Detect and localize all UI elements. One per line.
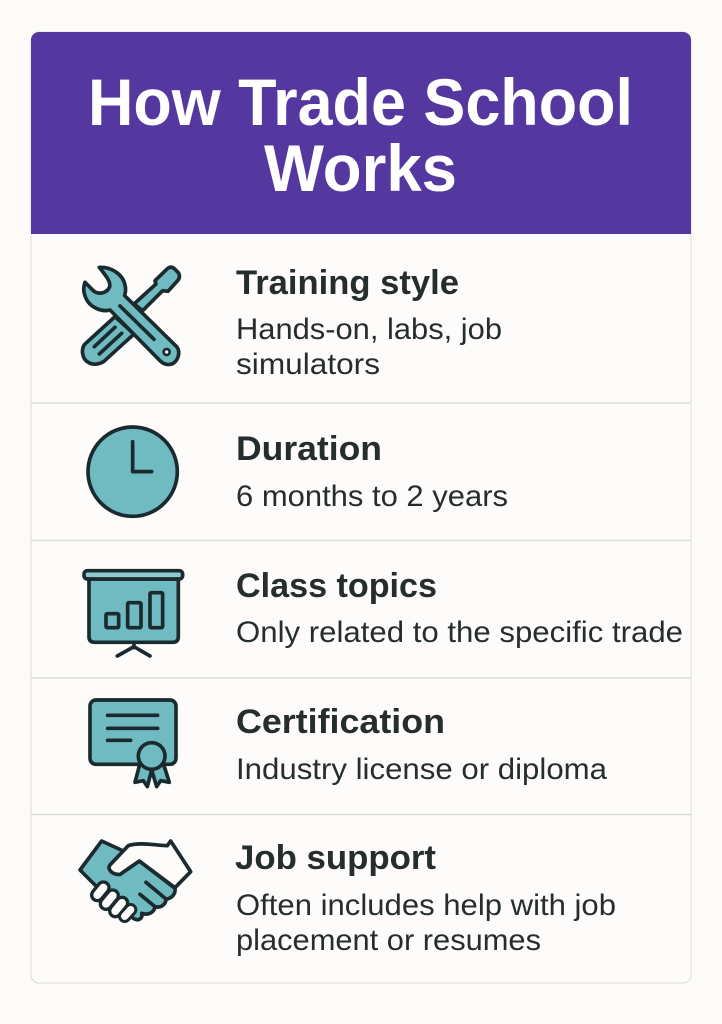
title: Works bbox=[264, 131, 457, 205]
icon: handshake bbox=[80, 841, 191, 920]
row: certification bbox=[90, 700, 607, 787]
heading: training style: Training style bbox=[236, 264, 459, 302]
text: job support detail: placement or resumes bbox=[236, 924, 541, 957]
icon: wrench and screwdriver bbox=[82, 267, 179, 365]
heading: duration: Duration bbox=[236, 430, 382, 468]
row: duration bbox=[88, 427, 508, 516]
text: training style detail: Hands-on, labs, job bbox=[236, 313, 502, 346]
text: certification detail: Industry license or diploma bbox=[236, 753, 607, 786]
heading: job support: Job support bbox=[235, 839, 436, 877]
icon: clock bbox=[88, 427, 177, 516]
heading: class topics: Class topics bbox=[236, 567, 437, 605]
header banner bbox=[31, 32, 691, 234]
text: job support detail bbox=[236, 889, 616, 957]
title: How Trade School bbox=[88, 65, 633, 139]
icon: presentation board bbox=[84, 571, 183, 656]
row: job support bbox=[80, 839, 616, 957]
text: training style detail: simulators bbox=[236, 348, 380, 381]
row: training style bbox=[82, 264, 502, 381]
text: duration detail: 6 months to 2 years bbox=[236, 480, 508, 513]
text: job support detail: Often includes help with job bbox=[236, 889, 616, 922]
title bbox=[88, 65, 633, 205]
text: training style detail bbox=[236, 313, 502, 381]
icon: certificate bbox=[90, 700, 176, 787]
heading: certification: Certification bbox=[236, 703, 445, 741]
text: class topics detail: Only related to the specific trade bbox=[236, 616, 683, 649]
row: class topics bbox=[84, 567, 683, 656]
